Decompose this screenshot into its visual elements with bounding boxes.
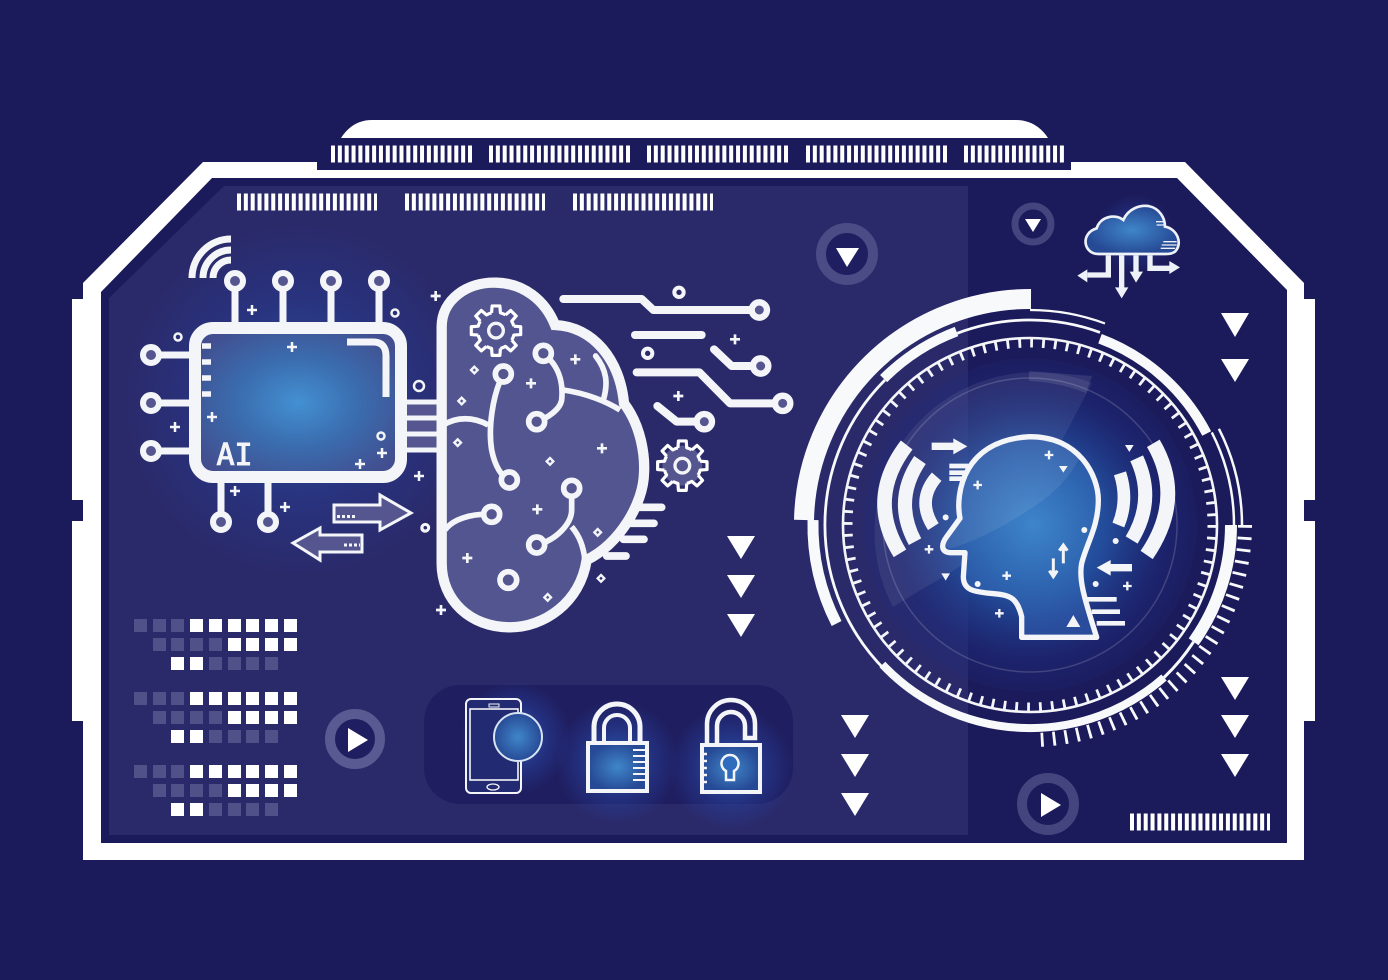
icon: smartphone xyxy=(459,682,571,794)
icon: wifi xyxy=(192,239,231,278)
circuit nodes xyxy=(422,288,790,531)
head detail lines xyxy=(949,466,1125,623)
chip body xyxy=(195,328,401,477)
cloud detail lines xyxy=(1156,222,1177,248)
brain plus marks xyxy=(431,291,607,615)
head silhouette xyxy=(943,437,1098,637)
AI chip xyxy=(125,225,475,575)
triangle column: lower right xyxy=(1221,677,1249,777)
data squares: group 2 xyxy=(134,692,297,743)
head triangles xyxy=(941,445,1134,627)
triangle column: centre xyxy=(727,536,755,637)
sound waves: left xyxy=(885,445,937,553)
button: play left xyxy=(330,714,380,764)
panel: security icons xyxy=(424,682,793,830)
head dots xyxy=(943,514,1119,587)
brain inner pathways xyxy=(443,353,620,560)
brain nodes xyxy=(484,345,580,588)
circuit plus marks xyxy=(673,334,740,401)
plus marks and small circles around chip xyxy=(170,305,428,532)
data squares: group 1 xyxy=(134,619,297,670)
button: down top right xyxy=(1015,206,1051,242)
barcode strip: panel top xyxy=(237,194,713,210)
arrow: into head xyxy=(932,438,967,454)
icon: open padlock xyxy=(669,700,793,830)
head overlay highlight xyxy=(945,437,1080,548)
chip connectors to brain xyxy=(405,402,438,450)
brain illustration xyxy=(422,283,790,627)
cloud arrowheads xyxy=(1077,261,1180,298)
head plus marks xyxy=(925,451,1132,618)
panel: main content area xyxy=(109,186,968,835)
brain outline xyxy=(442,283,644,627)
gear: right xyxy=(658,441,707,490)
disc: radial glow xyxy=(863,358,1197,692)
glow: cloud xyxy=(1095,193,1175,273)
arrow: left data flow xyxy=(293,528,362,560)
radial HUD xyxy=(804,299,1245,740)
chip pins xyxy=(143,273,387,530)
chip ticks xyxy=(202,346,211,394)
triangle column: lower centre xyxy=(841,715,869,816)
outer HUD frame xyxy=(72,162,1315,860)
chip corner bracket xyxy=(347,342,386,397)
brain diamonds xyxy=(454,367,604,601)
icon: cloud xyxy=(1077,193,1180,298)
circuit traces xyxy=(563,299,773,422)
glow: chip xyxy=(125,225,475,575)
head group xyxy=(885,437,1168,637)
triangle column: upper right xyxy=(1221,313,1249,382)
disc: translucent highlight xyxy=(874,372,1092,607)
icon: closed padlock xyxy=(555,700,679,824)
arrow: out of head xyxy=(1097,560,1132,576)
button: down top centre xyxy=(821,228,873,280)
brain side lines xyxy=(607,507,662,556)
disc: top highlight band xyxy=(1029,371,1092,393)
cloud arrows xyxy=(1087,255,1170,288)
outer arcs xyxy=(804,299,1245,740)
data squares: group 3 xyxy=(134,765,297,816)
button: play bottom right xyxy=(1022,778,1074,830)
barcode strip: top xyxy=(331,146,1064,162)
cloud outline xyxy=(1086,206,1179,254)
head small arrows xyxy=(1049,545,1067,577)
arrow: right data flow xyxy=(334,495,411,530)
disc: faint ring xyxy=(883,378,1177,672)
chip label: AI xyxy=(216,438,253,473)
brain gear xyxy=(471,306,521,355)
top cap xyxy=(341,120,1048,138)
barcode strip: bottom right xyxy=(1130,814,1270,830)
sound waves: right xyxy=(1118,443,1168,555)
tick ring xyxy=(843,338,1217,712)
